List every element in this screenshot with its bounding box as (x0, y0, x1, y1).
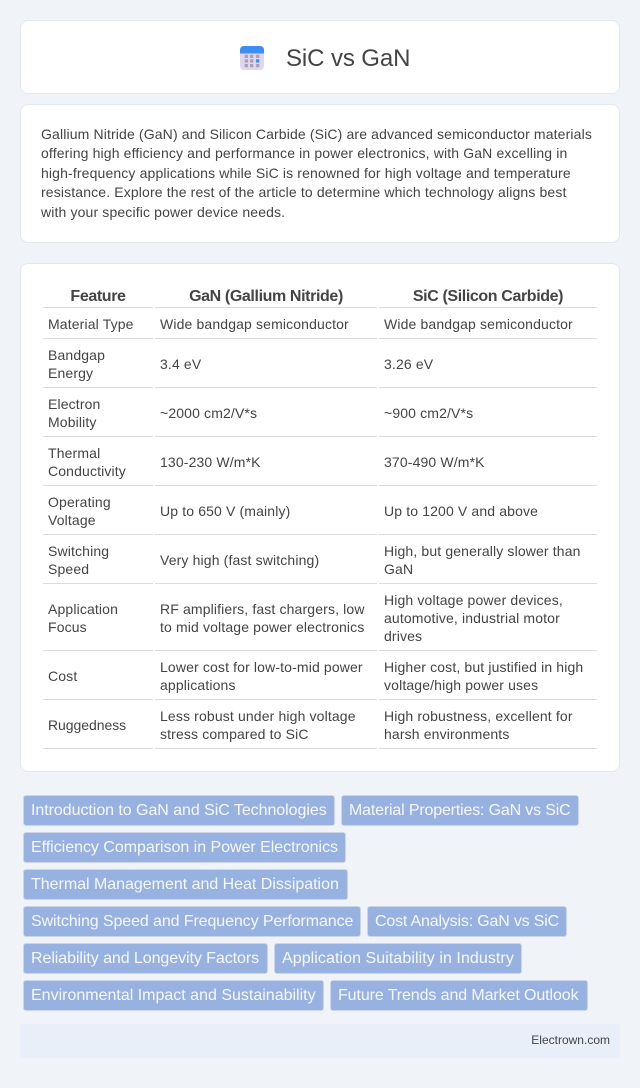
tag: Thermal Management and Heat Dissipation (31, 876, 339, 893)
row: thermal conductivity: Conductivity (48, 463, 126, 479)
column headers: GaN (Gallium Nitride) (189, 288, 343, 305)
intro paragraph (41, 126, 592, 220)
tag (23, 980, 324, 1011)
tag (23, 906, 361, 937)
row: material type: Wide bandgap semiconductor (160, 316, 349, 332)
row: ruggedness: stress compared to SiC (160, 726, 309, 742)
row: electron mobility (43, 396, 597, 437)
column headers: SiC (Silicon Carbide) (413, 288, 563, 305)
row: material type: Wide bandgap semiconductor (384, 316, 573, 332)
comparison table panel (20, 263, 620, 772)
intro paragraph: offering high efficiency and performance in power electronics, with GaN excelling in (41, 145, 567, 161)
row: cost: Cost (48, 668, 77, 684)
tag: Environmental Impact and Sustainability (31, 987, 316, 1004)
tag (23, 943, 268, 974)
header panel (20, 20, 620, 94)
row: bandgap energy: 3.26 eV (384, 356, 433, 372)
row: thermal conductivity: 130-230 W/m*K (160, 454, 261, 470)
row: cost: Higher cost, but justified in high (384, 659, 583, 675)
tag: Switching Speed and Frequency Performance (31, 913, 353, 930)
row: operating voltage (43, 494, 597, 535)
tag (274, 943, 522, 974)
row: cost (43, 659, 597, 700)
intro text panel (20, 104, 620, 243)
row: application focus: High voltage power devices, (384, 592, 563, 608)
row: thermal conductivity (43, 445, 597, 486)
row: thermal conductivity: 370-490 W/m*K (384, 454, 485, 470)
tag: Future Trends and Market Outlook (338, 987, 578, 1004)
tag (23, 869, 348, 900)
row: bandgap energy: Energy (48, 365, 93, 381)
row: ruggedness: harsh environments (384, 726, 509, 742)
intro paragraph: Gallium Nitride (GaN) and Silicon Carbide (SiC) are advanced semiconductor materials (41, 126, 592, 142)
title: SiC vs GaN (286, 45, 410, 72)
row: operating voltage: Operating (48, 494, 111, 510)
tag (23, 795, 335, 826)
row: application focus: Focus (48, 619, 87, 635)
column headers: Feature (70, 288, 126, 305)
tag: Cost Analysis: GaN vs SiC (375, 913, 559, 930)
row: cost: Lower cost for low-to-mid power (160, 659, 363, 675)
intro paragraph: high-frequency applications while SiC is renowned for high voltage and temperature (41, 164, 571, 180)
icon: calendar grid (240, 46, 264, 70)
row: switching speed: Switching (48, 543, 109, 559)
intro paragraph: resistance. Explore the rest of the article to determine which technology aligns best (41, 184, 567, 200)
row: switching speed: Speed (48, 561, 89, 577)
row: application focus: drives (384, 628, 422, 644)
row: bandgap energy: Bandgap (48, 347, 105, 363)
row: electron mobility: Mobility (48, 414, 97, 430)
row: ruggedness: Less robust under high voltage (160, 708, 356, 724)
row: bandgap energy: 3.4 eV (160, 356, 201, 372)
row: application focus (43, 592, 597, 651)
row: switching speed (43, 543, 597, 584)
column headers (43, 288, 597, 308)
row: switching speed: GaN (384, 561, 413, 577)
row: operating voltage: Up to 1200 V and above (384, 503, 538, 519)
row: ruggedness: High robustness, excellent for (384, 708, 573, 724)
row: electron mobility: ~900 cm2/V*s (384, 405, 473, 421)
topic tags (23, 795, 588, 1011)
tag: Introduction to GaN and SiC Technologies (31, 802, 327, 819)
row: application focus: RF amplifiers, fast chargers, low (160, 601, 365, 617)
row: operating voltage: Up to 650 V (mainly) (160, 503, 290, 519)
row: ruggedness (43, 708, 597, 749)
row: bandgap energy (43, 347, 597, 388)
row: application focus: to mid voltage power electronics (160, 619, 364, 635)
row: ruggedness: Ruggedness (48, 717, 126, 733)
footer credit: Electrown.com (531, 1033, 610, 1047)
tag: Application Suitability in Industry (282, 950, 514, 967)
row: application focus: Application (48, 601, 118, 617)
row: material type: Material Type (48, 316, 134, 332)
row: cost: applications (160, 677, 236, 693)
row: electron mobility: Electron (48, 396, 100, 412)
tag: Material Properties: GaN vs SiC (349, 802, 570, 819)
tag: Reliability and Longevity Factors (31, 950, 259, 967)
tag: Efficiency Comparison in Power Electronics (31, 839, 338, 856)
row: cost: voltage/high power uses (384, 677, 538, 693)
row: switching speed: High, but generally slower than (384, 543, 581, 559)
footer bar (20, 1024, 620, 1058)
row: thermal conductivity: Thermal (48, 445, 100, 461)
tag (367, 906, 567, 937)
tag (330, 980, 588, 1011)
tag (23, 832, 346, 863)
intro paragraph: with your specific power device needs. (41, 204, 285, 220)
tag (341, 795, 579, 826)
row: application focus: automotive, industrial motor (384, 610, 560, 626)
row: material type (43, 316, 597, 339)
row: switching speed: Very high (fast switching) (160, 552, 319, 568)
row: operating voltage: Voltage (48, 512, 96, 528)
row: electron mobility: ~2000 cm2/V*s (160, 405, 257, 421)
